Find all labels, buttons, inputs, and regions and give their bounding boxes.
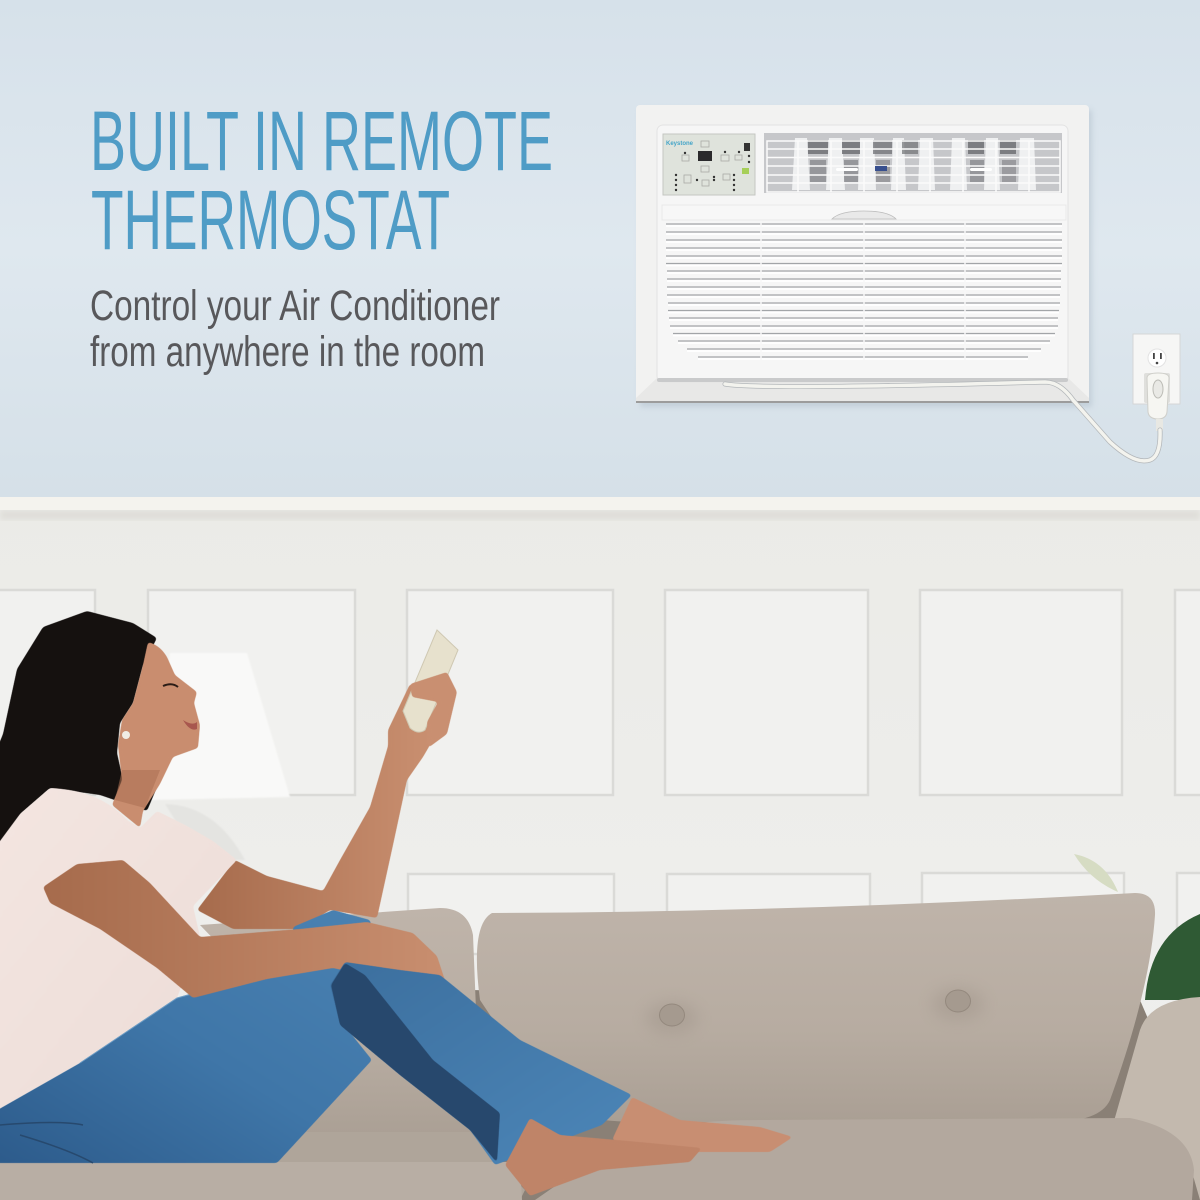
- front arm resting on knee: [43, 860, 456, 1014]
- sofa base shadow: [0, 990, 1200, 1200]
- jeans torso and thigh: [0, 910, 380, 1163]
- lower leg jeans: [330, 962, 632, 1165]
- wall background: [0, 0, 1200, 498]
- right seat cushion: [535, 1118, 1194, 1200]
- woman with remote: [0, 611, 793, 1196]
- subheading: from anywhere in the room: [90, 328, 485, 376]
- fingers holding remote: [410, 672, 457, 748]
- long dark hair: [0, 611, 160, 880]
- lower foot: [505, 1118, 702, 1196]
- wainscot panelling: [0, 497, 1200, 1200]
- left back cushion: [200, 908, 480, 1140]
- table lamp: [150, 653, 290, 860]
- right armrest: [1110, 997, 1200, 1200]
- face and neck: [112, 642, 200, 828]
- cushion tufting shade: [646, 988, 984, 1034]
- raised arm: [197, 684, 430, 929]
- control panel: Keystone: [666, 141, 694, 147]
- heading: BUILT IN REMOTE: [90, 94, 553, 188]
- AC front body: [657, 125, 1068, 382]
- pink t-shirt: [0, 788, 237, 1120]
- sofa: [0, 893, 1200, 1200]
- remote control: [403, 630, 458, 732]
- control panel: [663, 134, 755, 195]
- heading: [90, 94, 553, 267]
- air vent louvers: [764, 133, 1062, 193]
- upper foot: [612, 1097, 793, 1152]
- power cord: [725, 382, 1160, 461]
- subheading: [90, 282, 500, 376]
- right back cushion: [477, 893, 1155, 1122]
- heading: THERMOSTAT: [91, 173, 450, 267]
- AC wall sleeve frame: [636, 105, 1092, 407]
- wall air conditioner: [636, 105, 1092, 407]
- subheading: Control your Air Conditioner: [90, 282, 500, 330]
- power outlet and plug: [1133, 334, 1180, 431]
- plant leaves: [1074, 854, 1200, 1000]
- pearl earring: [122, 731, 130, 739]
- left seat cushion: [0, 1132, 525, 1200]
- AC intake grille slats: [666, 224, 1062, 357]
- sofa buttons: [660, 990, 970, 1026]
- AC front bar with handle: [662, 205, 1066, 220]
